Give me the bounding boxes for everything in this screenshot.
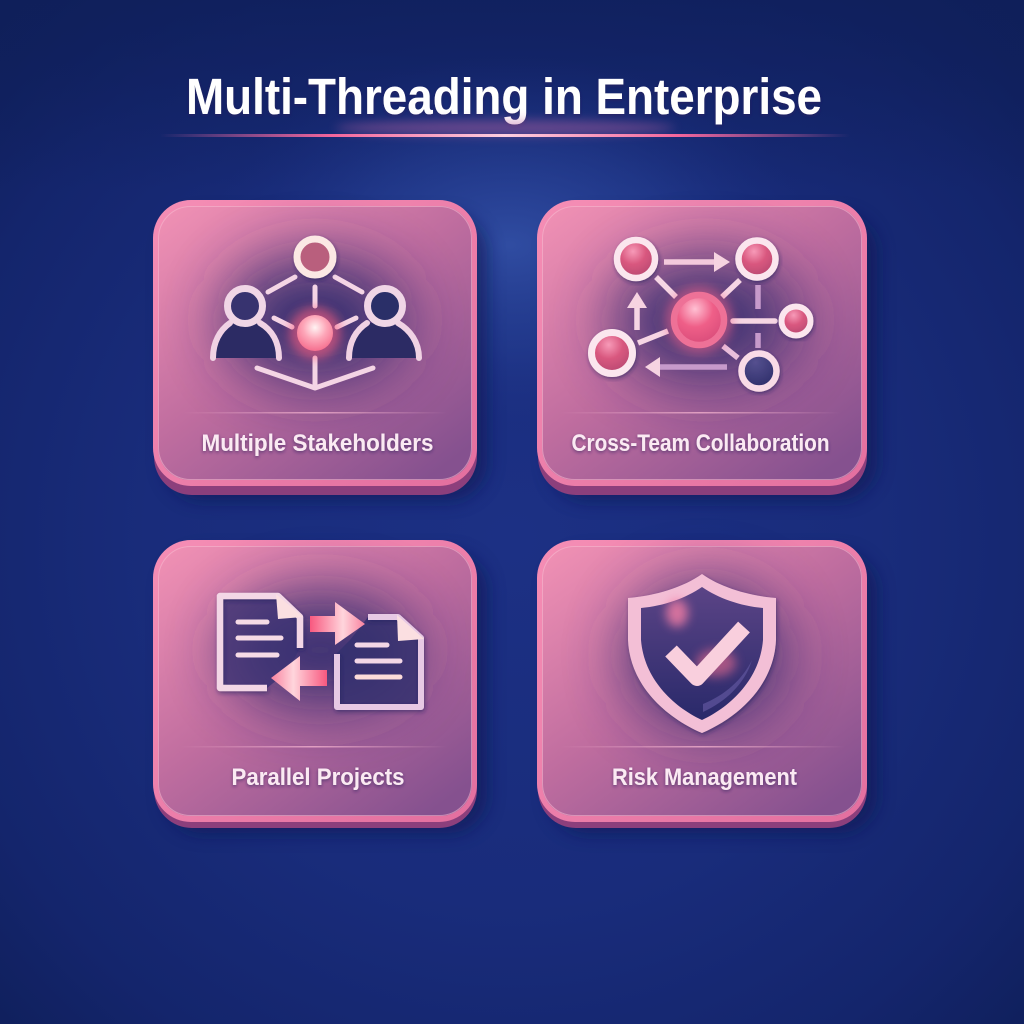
label: cross-team collaboration: Cross-Team Collaboration	[572, 430, 830, 457]
icon: stakeholders network	[213, 239, 419, 388]
panel: risk management	[537, 540, 877, 833]
arrow: to the left	[271, 656, 327, 701]
title underline	[160, 120, 850, 137]
arrowheads	[627, 252, 730, 377]
panel: cross-team collaboration	[537, 200, 877, 500]
label: parallel projects: Parallel Projects	[232, 764, 404, 791]
icon: collaboration network	[592, 240, 810, 388]
icon: parallel documents	[220, 594, 424, 707]
document two	[337, 615, 424, 707]
document one	[220, 594, 303, 688]
arrow: to the right	[310, 602, 365, 645]
title: Multi-Threading in Enterprise	[186, 68, 822, 125]
label: multiple stakeholders: Multiple Stakeholders	[202, 430, 434, 457]
panel: multiple stakeholders	[153, 200, 487, 500]
panel: parallel projects	[153, 540, 487, 833]
label: risk management: Risk Management	[612, 764, 797, 791]
icon: shield with check	[628, 574, 776, 733]
